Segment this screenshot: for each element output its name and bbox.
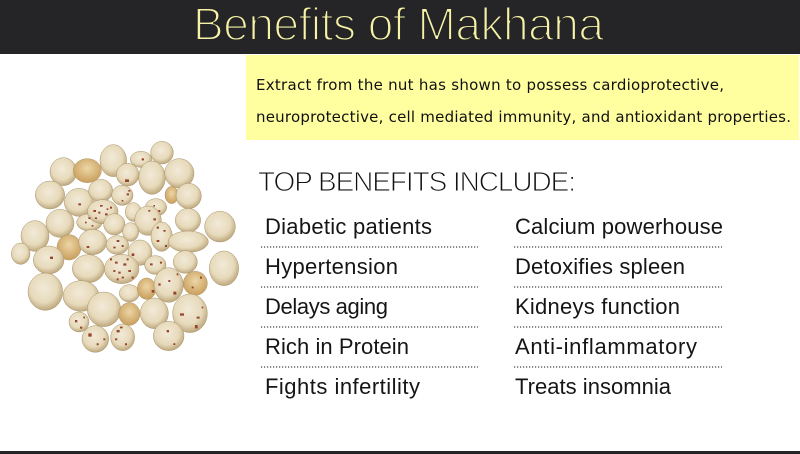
list: left column benefits: Delays aging [265, 294, 388, 319]
list: left column benefits: Fights infertility [265, 374, 420, 399]
callout: extract properties [246, 55, 799, 140]
image: pile of makhana nuts [11, 141, 239, 352]
list: left column benefits: Diabetic patients [265, 214, 432, 239]
callout: extract properties: Extract from the nut has shown to possess cardioprotective, [256, 76, 724, 94]
callout: extract properties: neuroprotective, cell mediated immunity, and antioxidant properties. [256, 108, 791, 126]
footer band [0, 451, 800, 454]
heading: top benefits: TOP BENEFITS INCLUDE: [258, 166, 576, 197]
header band [0, 0, 800, 54]
list: left column benefits [261, 214, 478, 399]
list: right column benefits: Kidneys function [515, 294, 680, 319]
list: right column benefits: Calcium powerhouse [515, 214, 723, 239]
list: right column benefits: Anti-inflammatory [515, 334, 697, 359]
list: right column benefits: Treats insomnia [515, 374, 672, 399]
list: right column benefits: Detoxifies spleen [515, 254, 685, 279]
list: left column benefits: Rich in Protein [265, 334, 409, 359]
list: right column benefits [514, 214, 723, 399]
list: left column benefits: Hypertension [265, 254, 398, 279]
